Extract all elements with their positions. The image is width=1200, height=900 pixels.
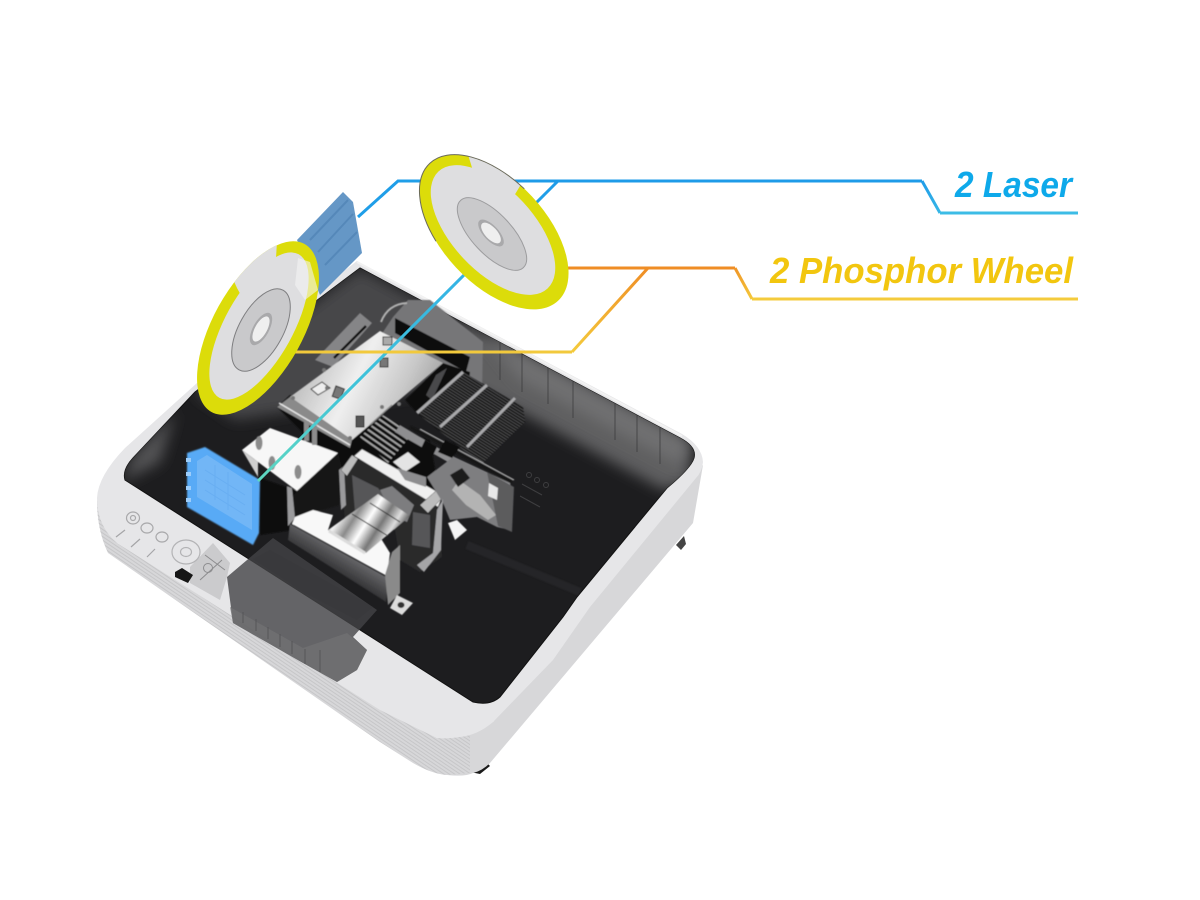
hub ring: [245, 309, 277, 349]
diagonal dark bar: [410, 427, 512, 482]
module tabs: [186, 458, 191, 502]
cover inner window: [253, 550, 373, 620]
phosphor branch: [572, 268, 648, 352]
cover body: [227, 538, 377, 682]
cover lower band: [230, 607, 367, 682]
white foot tab: [448, 520, 467, 540]
pins: [256, 421, 317, 479]
control panel: [116, 512, 230, 600]
disc edge line: [392, 128, 596, 336]
laser module: rear: [297, 192, 362, 295]
power button: [126, 512, 140, 524]
grey disc: [190, 238, 328, 414]
mounting foot: [390, 595, 413, 615]
foot hole: [398, 602, 404, 608]
top connector: [315, 313, 372, 367]
floor fold: [467, 545, 580, 592]
phosphor main horizontal: [565, 266, 735, 270]
cover ribs: [243, 612, 320, 672]
top-left white block: [242, 428, 338, 491]
hub center: [478, 219, 504, 247]
module face: [197, 455, 252, 530]
cable loop: [381, 303, 407, 322]
center plate: [446, 187, 538, 281]
block left face: [242, 450, 258, 477]
phosphor wheel: left: [197, 241, 319, 415]
projector body: [97, 261, 703, 776]
control board parts: [200, 555, 225, 580]
translucent cover: [227, 538, 377, 682]
cavity floor: [124, 268, 694, 703]
laser leader down to front module: [258, 181, 558, 481]
phosphor elbow: [735, 268, 752, 299]
large heatsink: [417, 372, 525, 463]
bar clamps: [341, 455, 444, 513]
phosphor lower horizontal: [285, 350, 572, 354]
rear housing: [383, 300, 483, 395]
lower frame leg: [385, 545, 400, 605]
right bracket: [417, 499, 443, 572]
mechanism white tab: [488, 483, 498, 500]
translucent highlight: [295, 258, 318, 300]
block dark side: [258, 477, 297, 535]
function buttons: [141, 523, 168, 542]
grey disc: [408, 144, 578, 316]
board edge highlight: [279, 403, 350, 445]
rear housing slot: [395, 318, 470, 372]
heatsink bars: [417, 372, 515, 447]
interior grey parts: [352, 475, 430, 548]
white center block: [393, 452, 420, 472]
rear rim edge: [357, 262, 682, 436]
label: 2 Phosphor Wheel: 2 Phosphor Wheel: [769, 250, 1074, 291]
upper frame band: [395, 425, 512, 490]
ring gap: [234, 245, 277, 293]
mechanism light detail: [452, 480, 496, 520]
rear wall upper highlight: [480, 330, 690, 465]
diagonal bar highlight: [420, 429, 514, 480]
block lower part: [397, 468, 426, 487]
navigation pad: [172, 540, 200, 564]
button labels: [116, 530, 155, 557]
board edge: [277, 397, 352, 448]
rear wall left part: [195, 268, 470, 420]
right mechanism: [427, 457, 513, 530]
dark gap under housing: [405, 363, 470, 413]
ring gap: [468, 156, 520, 194]
yellow ring: [392, 128, 596, 336]
rear module fins: [310, 200, 357, 265]
center plate: [220, 280, 302, 380]
side wall striations: [97, 505, 470, 775]
block under side: [290, 453, 342, 518]
hub ring: [474, 215, 508, 251]
IR window: [175, 568, 193, 583]
module inner grid: [205, 465, 245, 515]
lens collar: [329, 531, 365, 553]
board components: [291, 337, 401, 440]
dark pockets: [418, 440, 460, 462]
left wall: [122, 412, 175, 482]
laser main horizontal: [515, 180, 922, 182]
laser elbow: [922, 181, 940, 213]
floor embossed marks: [520, 472, 548, 507]
fan detail: [426, 368, 447, 400]
leader lines: [258, 181, 1078, 481]
module edge: [187, 447, 260, 545]
hub center: [249, 314, 273, 344]
frame support under board: [277, 395, 440, 497]
label: 2 Laser: 2 Laser: [954, 164, 1074, 205]
lens: [328, 494, 410, 553]
laser underline: [940, 212, 1078, 214]
connector slot: [334, 326, 366, 358]
phosphor wheel: right: [418, 154, 569, 310]
lower frame: [288, 524, 388, 602]
right foot: [676, 536, 686, 550]
phosphor underline: [752, 298, 1078, 300]
white cross bar: [354, 449, 443, 507]
rear module body: [297, 192, 362, 295]
body side wall: [97, 465, 703, 776]
lower white plate: [292, 510, 390, 576]
laser leader to rear module: [358, 181, 520, 217]
translucent control board: [190, 543, 230, 600]
frame column: [287, 486, 295, 526]
mechanism right plate: [487, 472, 514, 532]
frame verticals: [339, 466, 346, 510]
open cavity interior: [122, 268, 694, 703]
top rim: [97, 261, 703, 738]
yellow ring: [172, 222, 344, 434]
optical engine: [242, 300, 525, 615]
laser module: front: [186, 447, 260, 545]
lens gear: [380, 486, 414, 522]
rear wall right part: [460, 322, 690, 490]
lens ring lines: [352, 503, 400, 536]
mechanism dark detail: [450, 468, 470, 487]
wall ribs: [500, 342, 660, 464]
frame interior: [340, 460, 442, 572]
front foot: [470, 762, 490, 774]
silver board: [290, 331, 443, 440]
small heatsink: [360, 415, 413, 463]
